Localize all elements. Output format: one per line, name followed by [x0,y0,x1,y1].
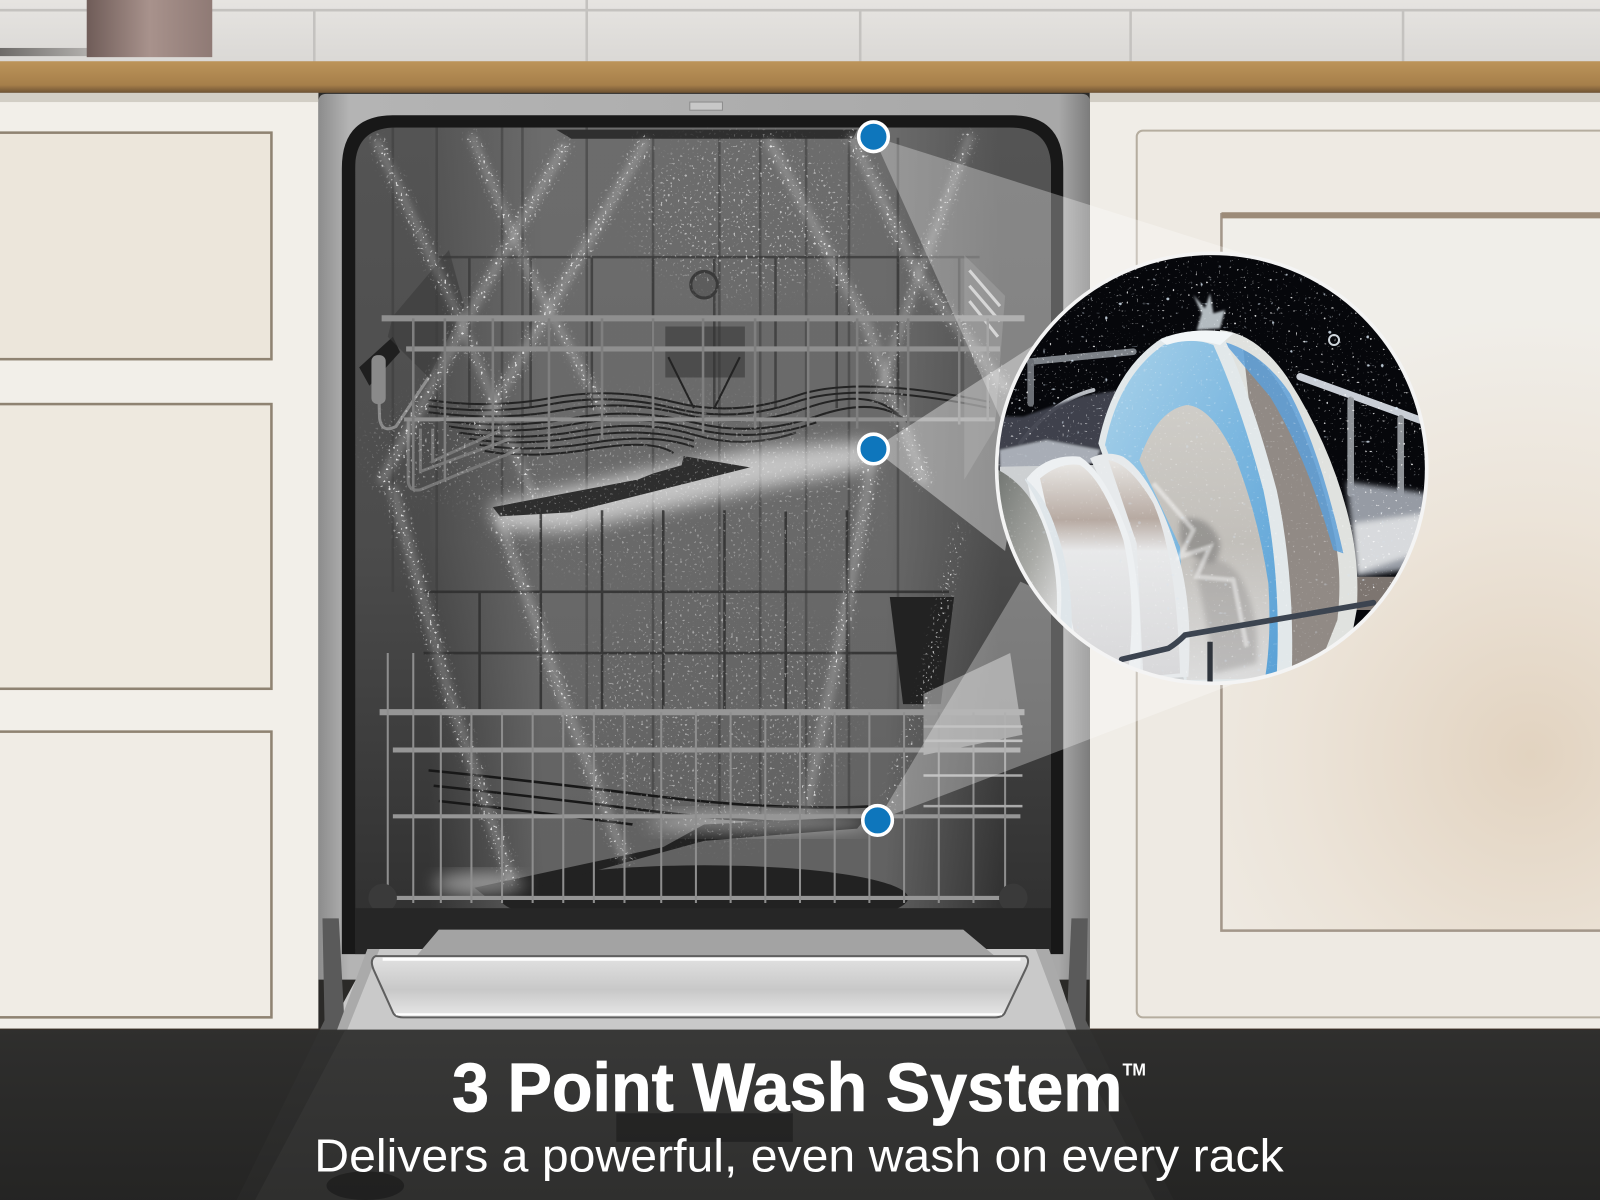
title: 3 Point Wash System [452,1050,1122,1126]
beam: middle nozzle [873,342,1039,551]
small plate rear [1090,454,1190,680]
foam left [993,390,1120,473]
lower rack back wires [423,510,949,714]
cabinet panel top [0,133,271,359]
sump floor dark [355,908,1051,954]
middle spray arm with glow [490,441,872,531]
silverware basket [890,597,954,704]
top spray arm [556,130,857,139]
door inner surface [237,949,1173,1200]
back wall ribs [393,128,898,816]
rinse tray [372,956,1028,1017]
tub interior [347,122,1061,954]
front rack wire [1122,603,1373,659]
top latch [690,102,722,110]
water jets haze [378,138,1005,878]
left cabinet [0,93,318,1037]
door vent under band [327,1171,404,1200]
right side dish box [923,653,1022,755]
trademark: TM [1122,1060,1146,1080]
open door [237,918,1173,1200]
front bowl [998,470,1057,615]
right cabinet [1090,93,1600,1037]
rear raised step [416,930,995,956]
wooden countertop [0,61,1600,93]
dishwasher [318,94,1090,980]
rack back rails [1020,352,1420,493]
splash crown at top of plate [1160,293,1339,345]
door gasket [342,115,1063,954]
subtitle: Delivers a powerful, even wash on every rack [314,1129,1285,1181]
dark dish tines [429,327,990,455]
plate centre [1139,405,1269,680]
canister on counter [0,0,212,57]
utensil shelf [388,250,464,378]
beam: top nozzle [873,137,1255,429]
lower rack front rails [380,653,1024,903]
floor and kick plate [0,1029,1600,1200]
door frame [1137,131,1600,1017]
water spray droplets [358,128,1010,886]
rack hub [691,271,717,298]
bottom sump [500,865,908,908]
light beams from spray points [873,137,1255,820]
rack wheels [369,884,1026,908]
upper rack front rails [382,318,1024,490]
left rack support [359,337,400,386]
blue marker: middle arm [859,434,888,464]
water splash on the plate [1153,483,1247,647]
recessed door panel [1221,214,1600,931]
wall tiles [0,0,1600,63]
right utensil shelf [964,255,1005,480]
rack basket left corner [378,376,521,492]
back plate [1220,330,1358,648]
back wall [429,128,1000,923]
door right edge [1066,918,1173,1200]
small plate middle [1027,456,1141,677]
under-layer behind dishes [1000,465,1184,680]
circle border [997,253,1427,683]
beam: lower nozzle [878,582,1240,820]
caption band [0,1030,1600,1200]
door left edge [237,918,345,1200]
cabinet panel bottom [0,732,271,1017]
upper rack back wires [439,257,980,408]
front plate [1098,331,1292,687]
blue marker: lower arm [863,806,892,835]
lower rack tines [429,770,878,824]
magnified circle: plates being washed [994,252,1428,686]
control panel under band [616,1113,793,1142]
blue marker: top arm [859,122,888,152]
outer steel frame [318,94,1090,980]
lower spray arm [474,816,867,900]
cabinet panel middle [0,404,271,689]
droplets [998,256,1425,678]
foam right [1347,482,1427,577]
door side strips [337,949,380,1031]
